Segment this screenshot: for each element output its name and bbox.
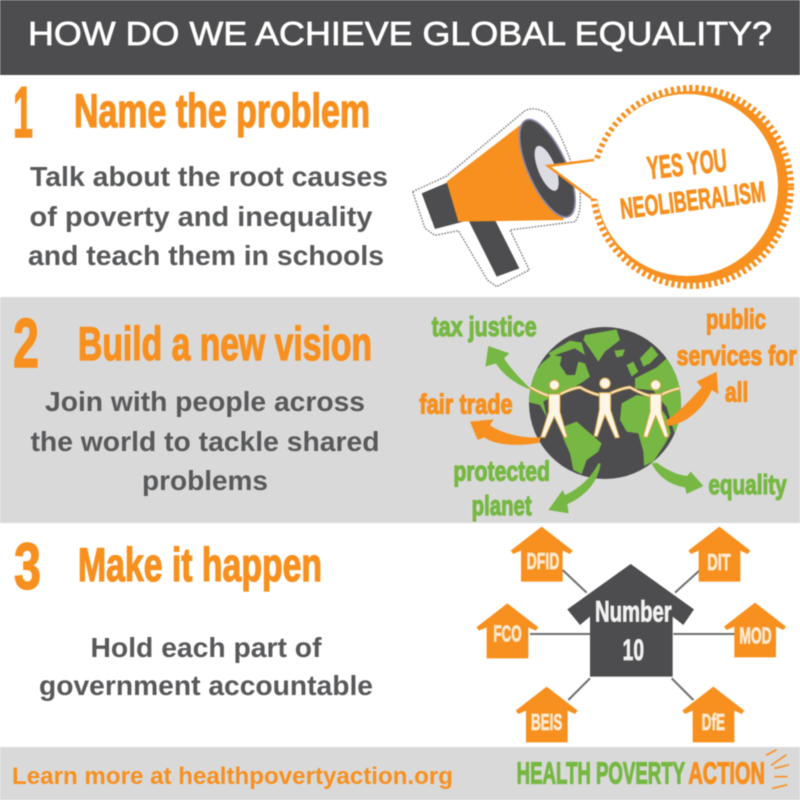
step number 2: 2 [13,304,39,382]
label: public services for all: all [725,377,748,408]
house: BEIS [516,687,578,742]
label: public services for all: public [706,303,766,334]
house: FCO: FCO [493,621,522,647]
text block: root causes: of poverty and inequality [30,201,373,232]
arrow: protected planet [548,463,601,513]
text block: join with people [30,386,380,496]
panel: section 2 background [0,297,800,523]
heading: name the problem: Name the problem [74,84,370,137]
house: FCO [476,603,538,658]
house: DFID [511,527,573,582]
text block: root causes [28,161,388,271]
arrow: tax justice [485,346,532,390]
house: DIT: DIT [707,549,731,575]
diagram: globe with arrows [419,303,797,521]
title banner: HOW DO WE ACHIEVE GLOBAL EQUALITY? [28,15,772,52]
arrow: fair trade [470,419,541,445]
text block: join with people: problems [142,465,268,496]
arrow: public services [666,372,718,426]
text block: join with people: Join with people across [45,386,365,417]
text block: hold government accountable: government accountable [39,670,373,701]
house: DIT [688,527,750,582]
house: Number 10: Number [595,596,672,629]
icon: logo rays [767,750,788,788]
callout text [618,142,767,226]
house: MOD: MOD [739,622,772,648]
panel: step 1: 1 [13,73,33,153]
arrow: equality [652,463,703,494]
label: protected planet: planet [472,490,532,521]
label: tax justice: tax justice [432,311,537,342]
text block: hold government accountable [39,632,373,701]
label: protected planet: protected [453,456,550,487]
house: Number 10: 10 [623,634,644,667]
title banner [0,0,800,75]
house: Number 10 [567,564,694,677]
house: DFID: DFID [527,548,559,574]
house: BEIS: BEIS [531,709,562,735]
text block: root causes: Talk about the root causes [30,161,388,192]
panel: step 1 [13,73,790,287]
panel: step 3 [14,527,786,742]
label: protected planet [453,456,550,521]
label: fair trade: fair trade [419,388,513,419]
icon: globe [527,327,683,479]
footer link text: Learn more at healthpovertyaction.org [12,763,453,790]
house: DfE [682,687,744,742]
house: DfE: DfE [702,709,725,735]
heading: build a new vision: Build a new vision [78,317,372,370]
icon: megaphone [413,109,586,287]
panel: step 2 [13,303,797,521]
text block: join with people: the world to tackle shared [30,426,380,457]
step number 3: 3 [14,529,41,603]
callout text: YES YOU [645,142,729,186]
text block: root causes: and teach them in schools [28,240,384,271]
house: MOD [724,603,786,657]
callout: speech burst [547,88,790,286]
logo: Health Poverty Action: HEALTH POVERTY [517,756,685,790]
diagram: government departments [476,527,786,742]
text block: hold government accountable: Hold each part of [90,632,322,663]
heading: make it happen: Make it happen [78,538,322,591]
icon: three people holding hands [530,378,680,438]
label: public services for all [677,303,797,408]
panel: footer background [0,747,800,800]
